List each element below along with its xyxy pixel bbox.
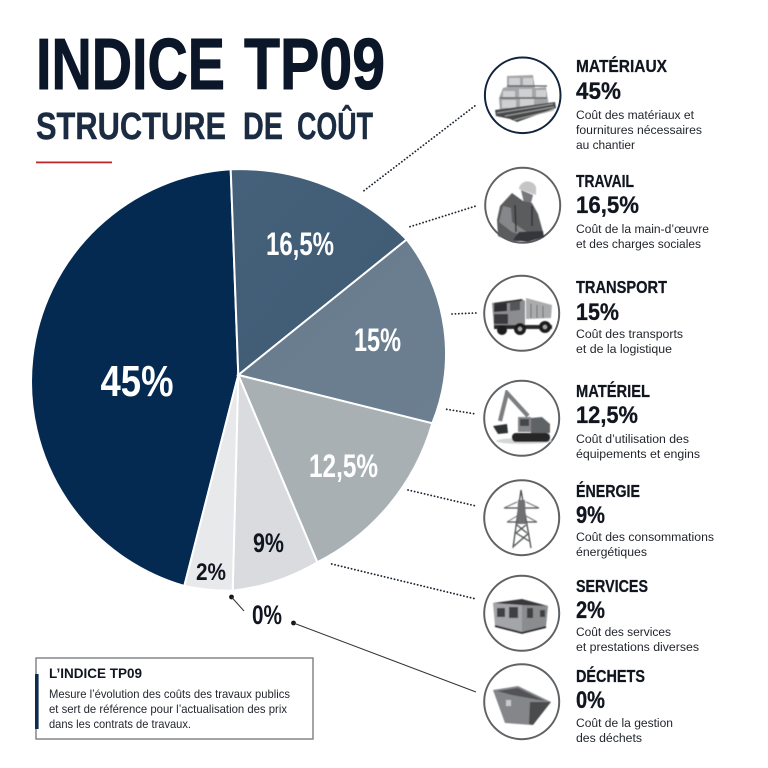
- item: matériaux: au chantier: [576, 138, 635, 152]
- label 45%: 45%: [100, 357, 174, 406]
- icon: building materials: [485, 58, 560, 133]
- item: services: Coût des services: [576, 625, 671, 639]
- label 0% with connector: [229, 595, 476, 692]
- icon: worker: [485, 168, 560, 243]
- subtitle: DE: [243, 106, 283, 148]
- title: TP09: [244, 25, 385, 105]
- label 9%: 9%: [253, 528, 284, 558]
- label 2%: 2%: [196, 559, 226, 586]
- label 0% with connector: 0%: [252, 600, 282, 630]
- item: matériel: 12,5%: [576, 402, 638, 429]
- item: transport: Coût des transports: [576, 327, 683, 341]
- item: matériel: équipements et engins: [576, 447, 700, 461]
- item: travail: 16,5%: [576, 192, 639, 219]
- item: déchets: des déchets: [576, 731, 642, 745]
- callout: l'indice TP09: [35, 658, 313, 739]
- item: travail: [485, 168, 709, 251]
- item: énergie: Coût des consommations: [576, 530, 714, 544]
- red accent rule: [36, 162, 112, 163]
- item: déchets: Coût de la gestion: [576, 716, 673, 730]
- item: déchets: [484, 664, 673, 745]
- item: transport: TRANSPORT: [576, 277, 667, 297]
- item: transport: et de la logistique: [576, 342, 672, 356]
- item: matériaux: [485, 55, 702, 152]
- callout: l'indice TP09: et sert de référence pour l’actualisation des prix: [49, 702, 287, 716]
- callout: l'indice TP09: Mesure l’évolution des coûts des travaux publics: [49, 687, 290, 701]
- item: énergie: 9%: [576, 502, 605, 529]
- subtitle: COÛT: [297, 103, 373, 148]
- icon: excavator: [484, 381, 559, 456]
- item: matériel: MATÉRIEL: [576, 380, 650, 401]
- item: matériaux: 45%: [576, 78, 621, 105]
- item: transport: [484, 276, 683, 356]
- subtitle: STRUCTURE: [36, 106, 226, 148]
- item: matériaux: MATÉRIAUX: [576, 55, 667, 76]
- icon: electricity pylon: [484, 480, 559, 555]
- item: services: et prestations diverses: [576, 640, 699, 654]
- slice: transport 15%: [238, 240, 446, 423]
- item: matériel: Coût d’utilisation des: [576, 432, 689, 446]
- item: énergie: ÉNERGIE: [576, 480, 640, 501]
- item: déchets: 0%: [576, 687, 605, 714]
- callout: l'indice TP09: dans les contrats de travaux.: [49, 717, 191, 731]
- slice: énergie 9%: [233, 375, 317, 591]
- slice: travail 16,5%: [231, 169, 407, 375]
- item: transport: 15%: [576, 299, 619, 326]
- item: services: [484, 576, 699, 654]
- item: travail: et des charges sociales: [576, 237, 701, 251]
- label 16,5%: 16,5%: [266, 226, 334, 262]
- label 15%: 15%: [354, 322, 401, 358]
- title: INDICE: [36, 25, 225, 105]
- slice: matériaux 45%: [31, 169, 238, 586]
- slice: matériel 12,5%: [238, 375, 432, 562]
- callout: l'indice TP09: L’INDICE TP09: [49, 666, 142, 681]
- item: services: 2%: [576, 597, 605, 624]
- item: énergie: [484, 480, 714, 559]
- icon: dump truck: [484, 276, 559, 351]
- subtitle: [36, 103, 373, 148]
- item: matériaux: fournitures nécessaires: [576, 123, 702, 137]
- slice: services 2%: [184, 375, 238, 591]
- item: énergie: énergétiques: [576, 545, 647, 559]
- item: déchets: DÉCHETS: [576, 665, 645, 686]
- item: matériel: [484, 380, 700, 461]
- pie chart: [31, 169, 446, 591]
- icon: site cabin: [484, 576, 559, 651]
- item: travail: Coût de la main-d’œuvre: [576, 222, 709, 236]
- item: services: SERVICES: [576, 576, 648, 596]
- icon: waste skip: [484, 664, 559, 739]
- label 12,5%: 12,5%: [309, 448, 378, 484]
- item: matériaux: Coût des matériaux et: [576, 108, 695, 122]
- title: [36, 25, 385, 105]
- leader lines: [332, 105, 476, 599]
- item: travail: TRAVAIL: [576, 171, 634, 191]
